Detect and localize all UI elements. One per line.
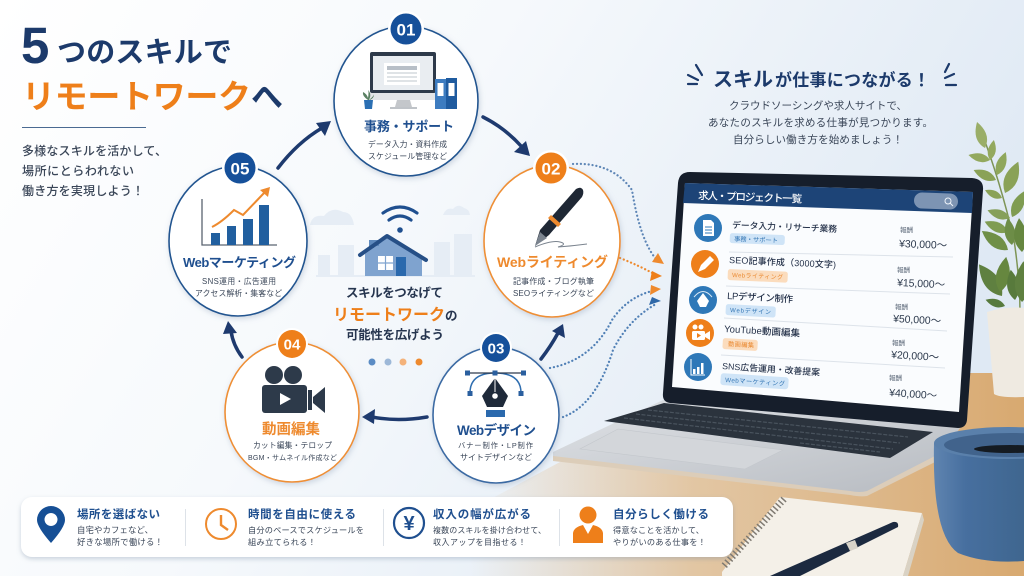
- title: へ: [251, 79, 283, 115]
- trackpad: [580, 429, 783, 469]
- lid bezel: [663, 172, 983, 428]
- right description: クラウドソーシングや求人サイトで、: [729, 99, 907, 112]
- job row 1: [694, 214, 948, 252]
- city and clouds: [310, 206, 472, 275]
- benefit: location: 場所を選ばない: [77, 507, 160, 521]
- benefit: self: [573, 506, 709, 547]
- right description: 自分らしい働き方を始めましょう！: [733, 133, 903, 146]
- skill 04: カット編集・テロップ: [253, 440, 332, 450]
- benefit: self: やりがいのある仕事を！: [613, 537, 706, 547]
- skill 04: 動画編集: [262, 420, 320, 438]
- skill 03: Webデザイン: [457, 422, 536, 438]
- right heading: スキル: [713, 69, 773, 91]
- skill 04: [225, 328, 359, 482]
- job row 4: YouTube動画編集: [724, 323, 801, 340]
- benefit: time: 自分のペースでスケジュールを: [248, 525, 364, 535]
- center illustration: [310, 206, 475, 277]
- job row 2: Webライティング: [732, 271, 783, 281]
- benefit: income: 複数のスキルを掛け合わせて、: [433, 525, 546, 535]
- skill 05: [169, 150, 307, 316]
- badge 04: 04: [284, 336, 301, 354]
- badge 05: 05: [231, 160, 249, 178]
- laptop: [553, 172, 983, 496]
- center message: [333, 286, 458, 342]
- icon: video camera: [262, 366, 325, 413]
- skill 05: アクセス解析・集客など: [195, 288, 282, 298]
- job row 1: 報酬: [900, 225, 913, 234]
- connector heads: [649, 253, 664, 305]
- center message: 可能性を広げよう: [346, 327, 444, 342]
- intro text: 多様なスキルを活かして、: [22, 143, 167, 158]
- job row 4: 報酬: [892, 338, 905, 347]
- benefit: self: 得意なことを活かして、: [613, 525, 704, 535]
- intro text: 場所にとらわれない: [22, 164, 134, 178]
- sparks: [688, 64, 956, 85]
- right description: [708, 99, 933, 146]
- job row 1: 事務・サポート: [734, 234, 778, 245]
- job row 4: 動画編集: [728, 339, 755, 350]
- title: [21, 17, 283, 115]
- job row 2: [691, 250, 946, 291]
- icon: pen tool: [465, 370, 526, 417]
- job row 3: 報酬: [895, 302, 908, 311]
- benefit: income: [394, 507, 546, 547]
- benefit: location: 自宅やカフェなど、: [77, 525, 153, 535]
- badge 01: 01: [397, 20, 415, 40]
- screen: [672, 183, 973, 412]
- title: つのスキルで: [57, 37, 232, 69]
- title: 5: [21, 17, 49, 74]
- skill 01: スケジュール管理など: [368, 151, 447, 161]
- job row 2: 報酬: [897, 265, 910, 274]
- badge 02: [533, 150, 569, 186]
- center message: リモートワーク: [333, 306, 445, 324]
- mug: [934, 427, 1024, 562]
- benefit: time: 時間を自由に使える: [248, 507, 356, 521]
- job row 5: [684, 353, 938, 402]
- job row 5: Webマーケティング: [725, 375, 786, 388]
- right heading: [688, 64, 956, 91]
- badge 05: [222, 150, 258, 186]
- skill 02: 記事作成・ブログ執筆: [513, 276, 594, 286]
- benefit: income: ¥: [403, 513, 415, 535]
- skill 03: サイトデザインなど: [460, 452, 532, 462]
- center message: の: [445, 309, 458, 323]
- skill 04: BGM・サムネイル作成など: [248, 453, 337, 462]
- badge 03: [480, 332, 512, 364]
- benefit: income: 収入アップを目指せる！: [433, 537, 526, 547]
- benefit: self: 自分らしく働ける: [613, 507, 709, 521]
- job row 3: Webデザイン: [730, 306, 771, 316]
- skill 01: [334, 11, 478, 176]
- laptop base: [553, 400, 960, 495]
- badge 04: [276, 328, 308, 360]
- skill 05: SNS運用・広告運用: [202, 276, 276, 286]
- center message: スキルをつなげて: [346, 286, 443, 300]
- wooden desk: [470, 373, 1024, 576]
- benefits panel: [21, 497, 733, 557]
- skill 02: Webライティング: [497, 254, 608, 270]
- benefit: location: 好きな場所で働ける！: [77, 537, 163, 547]
- screen header: [683, 183, 973, 213]
- skill 03: バナー制作・LP制作: [458, 441, 534, 450]
- benefit: time: [206, 507, 364, 547]
- arrow heads: [223, 121, 565, 424]
- coffee: [974, 445, 1024, 453]
- skill 03: [433, 332, 559, 483]
- dots: [368, 358, 422, 366]
- intro text: 働き方を実現しよう！: [22, 183, 144, 198]
- spiral binding: [724, 499, 784, 566]
- job row 3: ¥50,000～: [892, 313, 942, 328]
- dotted connectors: [550, 164, 656, 417]
- job row 5: SNS広告運用・改善提案: [722, 360, 821, 378]
- icon: monitor: [363, 52, 457, 109]
- job row 3: LPデザイン制作: [727, 290, 794, 305]
- job row 5: 報酬: [889, 373, 902, 382]
- icon: person: [573, 506, 603, 543]
- benefit: time: 組み立てられる！: [248, 537, 316, 547]
- job row 4: [686, 319, 940, 364]
- house: [365, 238, 422, 276]
- keyboard: [604, 403, 933, 458]
- screen header: 求人・プロジェクト一覧: [698, 189, 803, 206]
- icon: pin: [37, 506, 65, 543]
- wifi: [383, 207, 417, 233]
- icon: growth chart: [202, 187, 277, 245]
- skill 02: SEOライティングなど: [513, 288, 594, 298]
- icon: yen: [394, 508, 424, 538]
- badge 01: [388, 11, 424, 47]
- pen: [770, 522, 898, 576]
- skill 01: 事務・サポート: [364, 119, 454, 134]
- job row 1: データ入力・リサーチ業務: [732, 219, 837, 234]
- badge 02: 02: [542, 160, 560, 178]
- separators: [721, 252, 953, 368]
- icon: pen: [535, 188, 587, 247]
- skill 02: [484, 150, 620, 317]
- job row 1: ¥30,000～: [898, 238, 948, 252]
- job row 4: ¥20,000～: [890, 349, 940, 364]
- skill 05: Webマーケティング: [183, 255, 296, 270]
- circle arrows: [231, 117, 558, 420]
- right description: あなたのスキルを求める仕事が見つかります。: [708, 116, 933, 129]
- title: リモートワーク: [22, 78, 251, 115]
- icon: clock: [206, 509, 236, 539]
- right heading: が仕事につながる！: [775, 70, 930, 90]
- job row 2: ¥15,000～: [896, 277, 946, 291]
- search box: [914, 192, 958, 210]
- badge 03: 03: [488, 340, 504, 358]
- intro text: [22, 143, 167, 198]
- skill 01: データ入力・資料作成: [368, 139, 447, 149]
- job row 5: ¥40,000～: [888, 387, 938, 402]
- notebook: [722, 497, 924, 576]
- benefit: income: 収入の幅が広がる: [433, 507, 531, 521]
- job row 2: SEO記事作成（3000文字): [729, 254, 836, 270]
- plant pot: [987, 308, 1024, 397]
- plant stem and leaves: [968, 120, 1024, 312]
- job row 3: [689, 286, 942, 328]
- benefit: location: [37, 506, 163, 547]
- plant: [968, 120, 1024, 397]
